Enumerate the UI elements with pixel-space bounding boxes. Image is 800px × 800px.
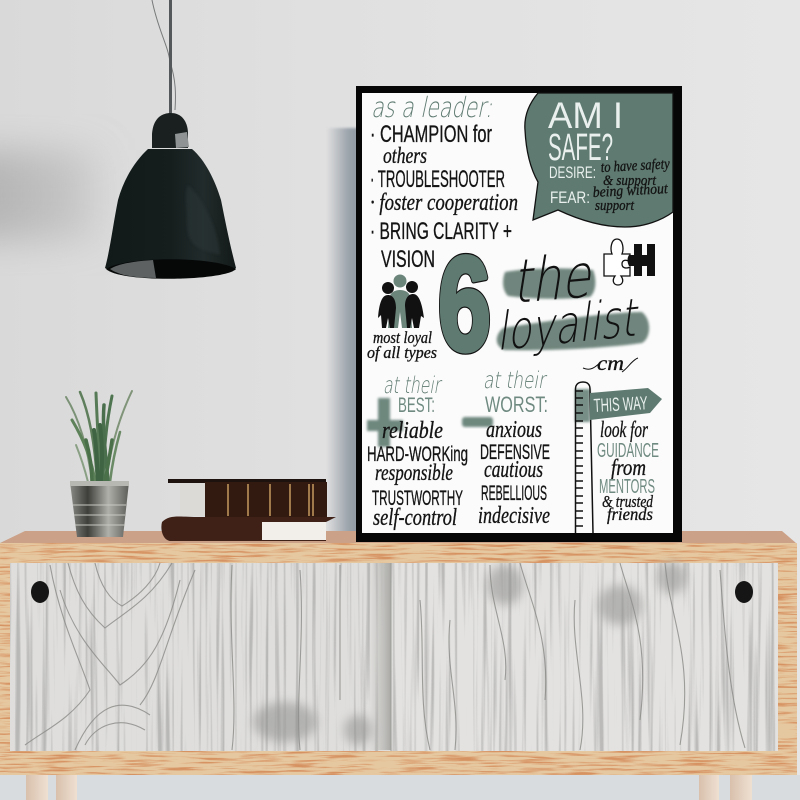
cabinet legs bbox=[26, 775, 752, 800]
speech bubble: am I safe: support bbox=[595, 198, 635, 214]
signature: cm bbox=[597, 353, 624, 375]
stacked books bbox=[161, 479, 336, 541]
column: at their best: at their bbox=[382, 372, 444, 399]
caption: most loyal bbox=[367, 328, 437, 362]
poster frame bbox=[356, 86, 682, 542]
leader list: others bbox=[383, 143, 427, 168]
post ticks bbox=[576, 391, 583, 526]
speech bubble: am I safe: & support bbox=[603, 173, 657, 189]
advice text: friends bbox=[607, 504, 653, 524]
lamp opening bbox=[106, 259, 236, 279]
caption: most loyal: most loyal bbox=[373, 328, 432, 347]
column: at their best: HARD-WORKing bbox=[367, 443, 468, 466]
speech bubble: am I safe: SAFE? bbox=[548, 127, 613, 169]
leader list: VISION bbox=[381, 246, 435, 273]
advice text: look for bbox=[600, 417, 649, 442]
right knob bbox=[735, 581, 753, 603]
poster bbox=[356, 86, 682, 542]
post shading bbox=[575, 389, 590, 422]
cabinet frame bbox=[0, 543, 797, 775]
pendant lamp bbox=[105, 0, 236, 279]
column: at their best bbox=[367, 372, 468, 531]
big number 6: 6 bbox=[438, 230, 491, 379]
column: at their best: reliable bbox=[382, 418, 443, 444]
top book bbox=[168, 479, 326, 483]
speech bubble: am I safe: to have safety bbox=[600, 156, 670, 176]
leader list: · BRING CLARITY + bbox=[370, 218, 512, 245]
signpost: THIS WAY bbox=[593, 393, 648, 417]
speech bubble: am I safe: being without bbox=[592, 181, 669, 201]
lamp wires bbox=[152, 0, 175, 110]
poster paper bbox=[362, 93, 673, 533]
post outline bbox=[576, 382, 593, 533]
advice text bbox=[597, 417, 659, 524]
signpost bbox=[575, 382, 662, 533]
advice text: GUIDANCE bbox=[597, 440, 659, 462]
column: at their worst bbox=[462, 367, 550, 529]
advice text: from bbox=[611, 455, 646, 480]
column: at their worst: anxious bbox=[486, 417, 542, 443]
column: at their worst: at their bbox=[482, 367, 549, 394]
sign arrow: this way bbox=[590, 388, 662, 420]
column: at their worst: indecisive bbox=[478, 503, 550, 529]
icon: three people bbox=[378, 274, 424, 328]
cabinet top surface bbox=[0, 531, 796, 543]
door shadow bbox=[370, 563, 391, 750]
leader list: · CHAMPION for bbox=[370, 121, 492, 148]
icon: puzzle pieces bbox=[604, 239, 655, 285]
advice text: & trusted bbox=[602, 492, 653, 511]
bottom book bbox=[161, 516, 336, 541]
potted plant bbox=[66, 391, 132, 537]
plus sign bbox=[367, 398, 403, 447]
speech bubble: am I safe bbox=[525, 93, 673, 227]
right door bbox=[391, 563, 778, 751]
brush stroke: loyalist bbox=[497, 312, 649, 350]
plant leaves bbox=[66, 391, 132, 482]
brush stroke: the bbox=[503, 268, 595, 299]
speech bubble: am I safe: DESIRE: bbox=[549, 163, 596, 182]
column: at their best: responsible bbox=[375, 460, 453, 485]
column: at their best: self-control bbox=[373, 505, 457, 531]
door grain bbox=[25, 563, 745, 750]
big number 6: 6 bbox=[438, 230, 491, 379]
script title: the: the bbox=[511, 240, 600, 318]
lamp cap bbox=[152, 113, 188, 148]
column: at their worst: WORST: bbox=[485, 392, 548, 417]
signature bbox=[583, 353, 638, 375]
leader list bbox=[370, 91, 518, 273]
minus sign bbox=[462, 417, 493, 427]
caption: most loyal: of all types bbox=[367, 343, 437, 362]
metal pot bbox=[70, 482, 129, 537]
script title: loyalist: loyalist bbox=[495, 287, 643, 363]
column: at their best: BEST: bbox=[398, 394, 435, 417]
column: at their best: TRUSTWORTHY bbox=[372, 487, 463, 510]
left knob bbox=[31, 581, 49, 603]
wooden cabinet bbox=[0, 531, 797, 800]
speech bubble: am I safe: AM I bbox=[548, 95, 623, 136]
column: at their worst: REBELLIOUS bbox=[481, 482, 547, 505]
leader list: · foster cooperation bbox=[370, 190, 518, 216]
speech bubble: am I safe: FEAR: bbox=[550, 188, 590, 207]
column: at their worst: DEFENSIVE bbox=[480, 441, 550, 464]
dark grain patches bbox=[253, 562, 686, 745]
leader list: · TROUBLESHOOTER bbox=[370, 166, 505, 193]
left door bbox=[10, 563, 392, 751]
heading: as a leader: as a leader: bbox=[370, 91, 497, 124]
advice text: MENTORS bbox=[599, 476, 655, 498]
column: at their worst: cautious bbox=[484, 457, 543, 483]
lamp shade bbox=[105, 149, 236, 278]
